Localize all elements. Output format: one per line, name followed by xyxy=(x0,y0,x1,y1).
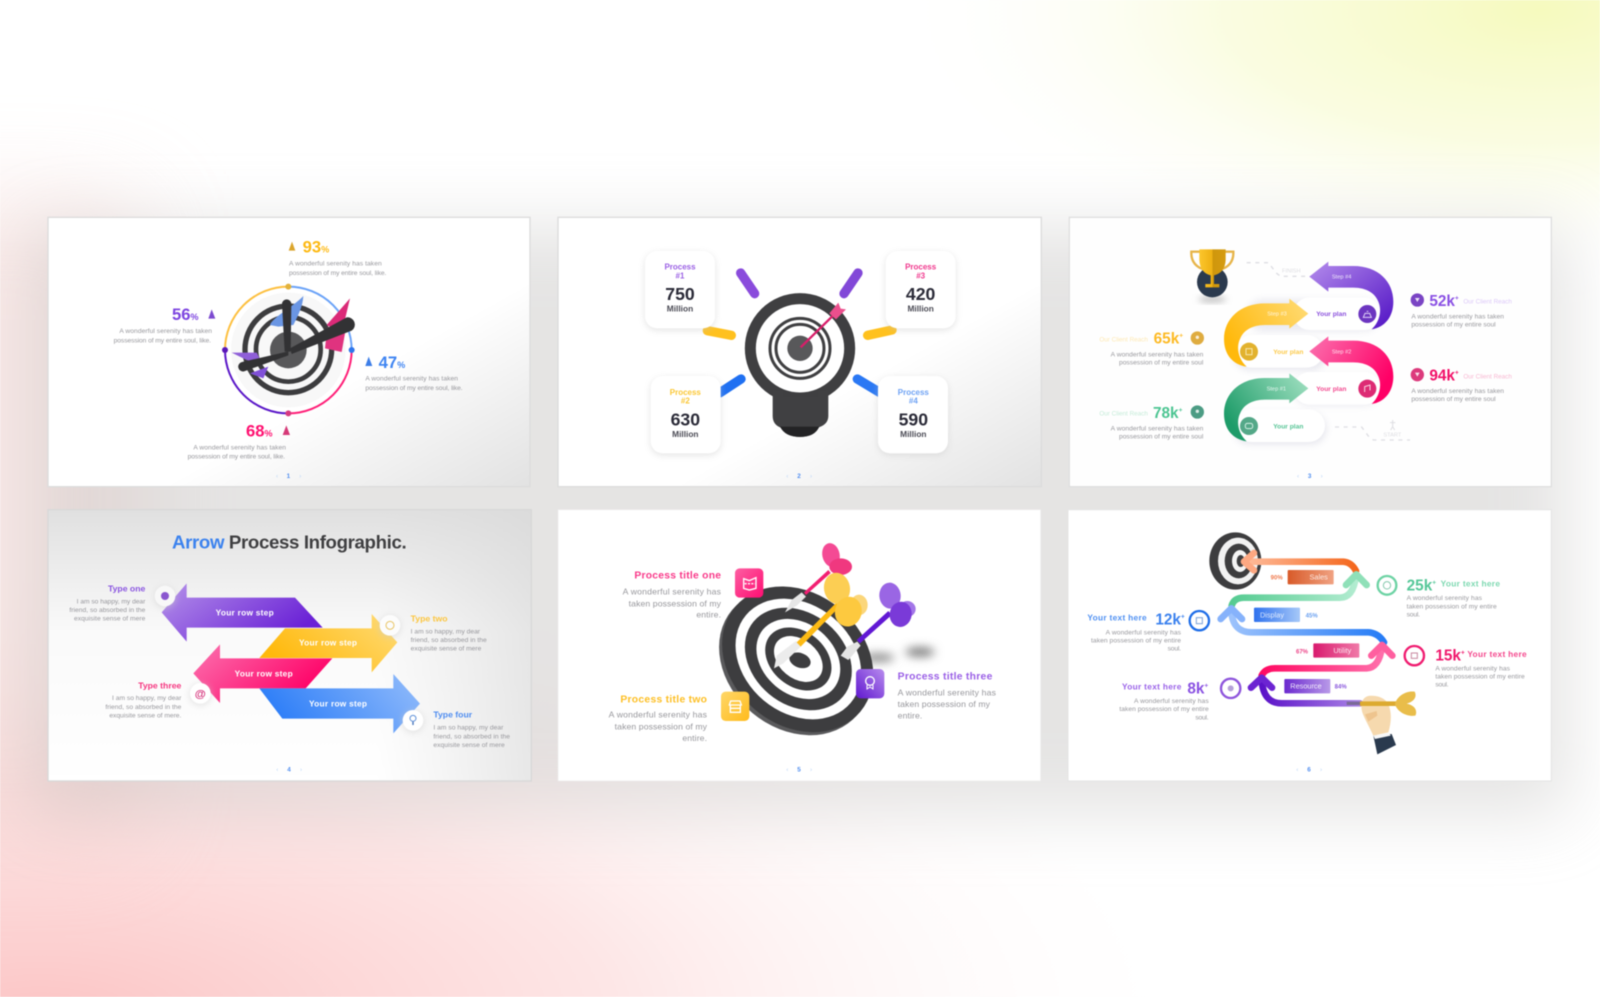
stat: 8k xyxy=(1119,679,1240,721)
text: type three: I am so happy, my dear xyxy=(112,695,182,702)
ring chart with target and darts xyxy=(222,284,355,416)
arrow: type two yellow xyxy=(259,614,397,672)
stat: 47 percent xyxy=(365,353,463,392)
pagination 3: 3 xyxy=(1308,473,1312,480)
stat: 15k: + xyxy=(1461,650,1465,657)
stat: 12k: A wonderful serenity has xyxy=(1106,629,1182,636)
title: Arrow Process Infographic. xyxy=(172,532,407,553)
light rays xyxy=(707,255,892,393)
panel 4 background xyxy=(48,510,531,781)
stat: 56 percent: A wonderful serenity has taken xyxy=(119,328,212,335)
card: process 1: Million xyxy=(667,304,693,314)
plan labels and icons: Your plan xyxy=(1273,349,1303,356)
stat: 93 percent: 93% xyxy=(303,238,329,257)
pagination 6: ‹ xyxy=(1296,767,1298,774)
stat: 15k: soul. xyxy=(1435,682,1449,689)
icon: type two clock xyxy=(379,615,401,638)
stat: 15k: 15k xyxy=(1435,648,1461,665)
light bulb with target xyxy=(750,299,850,437)
stat: 15k: A wonderful serenity has xyxy=(1435,666,1511,673)
panel: slide 2 light bulb target xyxy=(558,217,1041,487)
panel: slide 6 winding path to target xyxy=(1068,510,1551,781)
bar: resource: 84% xyxy=(1335,685,1347,691)
arrow: step 1 green xyxy=(1224,373,1308,441)
text: type three xyxy=(105,681,182,720)
icon tile: badge xyxy=(856,669,884,698)
pagination 2: › xyxy=(810,473,812,480)
text: type one: I am so happy, my dear xyxy=(77,598,146,605)
pagination 6: 6 xyxy=(1307,767,1311,774)
card: process 3: #3 xyxy=(916,271,926,280)
path: green xyxy=(1232,574,1367,606)
card: process 4: Million xyxy=(900,429,927,439)
text: type one: friend, so absorbed in the xyxy=(69,607,146,614)
text: process title three: A wonderful serenity has xyxy=(898,687,997,697)
text: type four: friend, so absorbed in the xyxy=(433,733,510,740)
finish dashed trail xyxy=(1247,263,1310,276)
path: blue xyxy=(1221,608,1384,642)
card: process 4 xyxy=(878,376,948,455)
text: process title two: Process title two xyxy=(620,694,707,705)
stat: 12k: soul. xyxy=(1168,646,1181,653)
pagination 5 xyxy=(786,767,812,774)
small target xyxy=(1209,532,1261,590)
card: process 2 xyxy=(651,376,721,455)
text: type three: Type three xyxy=(138,681,182,691)
text: process title two xyxy=(609,694,708,743)
text: process title one: Process title one xyxy=(634,570,721,581)
bar: sales xyxy=(1271,570,1334,584)
stat: 78k: Our Client Reach xyxy=(1099,411,1148,418)
text: process title one xyxy=(623,570,722,620)
plan labels and icons: Your plan xyxy=(1316,386,1346,393)
panel: slide 4 arrow process xyxy=(48,510,531,781)
stat: 25k: A wonderful serenity has xyxy=(1407,595,1483,602)
icon tile: store xyxy=(721,692,749,721)
plan labels and icons: Your plan xyxy=(1316,311,1346,318)
card: process 2: 630 xyxy=(671,409,700,429)
arrow: type one purple: Your row step xyxy=(216,607,274,617)
arrow: type three pink xyxy=(193,644,332,703)
stat: 94k: possession of my entire soul xyxy=(1411,396,1496,403)
stat: 52k: possession of my entire soul xyxy=(1411,321,1496,328)
panel 5 background xyxy=(558,510,1041,781)
stat: 94k: Our Client Reach xyxy=(1463,373,1512,380)
stat: 8k: soul. xyxy=(1195,714,1209,721)
pagination 1 xyxy=(276,473,301,480)
text: type four: I am so happy, my dear xyxy=(433,725,504,732)
text: process title one: entire. xyxy=(696,610,721,620)
stat: 12k: taken possession of my entire xyxy=(1091,637,1181,644)
stat: 8k: + xyxy=(1204,682,1208,689)
card: process 1: Process xyxy=(664,263,696,272)
arrow: type four blue xyxy=(259,674,420,733)
start dashed trail xyxy=(1335,420,1410,440)
stat: 25k: Your text here xyxy=(1441,579,1500,589)
stat: 8k: 8k xyxy=(1187,680,1204,697)
pagination 6 xyxy=(1296,767,1322,774)
icon: at sign: @ xyxy=(195,688,206,700)
icon: type one xyxy=(154,586,176,608)
text: type three: friend, so absorbed in the xyxy=(105,704,182,711)
stat: 65k: Our Client Reach xyxy=(1099,336,1148,343)
text: type four xyxy=(433,710,510,749)
stat: 15k xyxy=(1405,646,1527,689)
text: process title three: entire. xyxy=(898,710,922,720)
dart: purple xyxy=(841,582,916,660)
stat: 56 percent xyxy=(114,305,215,344)
text: process title two: taken possession of my xyxy=(615,722,708,732)
panel 2 background xyxy=(558,217,1041,487)
stat: 94k: A wonderful serenity has taken xyxy=(1411,388,1504,395)
card: process 1: #1 xyxy=(676,271,685,280)
bar: sales: 90% xyxy=(1271,576,1283,582)
path: pink xyxy=(1262,645,1392,676)
text: type four: Type four xyxy=(433,710,473,720)
pagination 6: › xyxy=(1320,767,1322,774)
dartboard xyxy=(690,556,903,765)
dart: pink xyxy=(785,541,852,612)
pagination 4: › xyxy=(300,767,302,774)
bar: utility: Utility xyxy=(1333,646,1352,655)
text: type two: Type two xyxy=(411,614,448,624)
card: process 2: #2 xyxy=(681,397,690,406)
icon: at sign xyxy=(189,683,211,706)
pagination 2: ‹ xyxy=(786,473,788,480)
bar: resource: Resource xyxy=(1290,682,1322,691)
pagination 5: 5 xyxy=(797,767,801,774)
bar: sales: Sales xyxy=(1309,572,1328,581)
stat: 78k: + xyxy=(1179,407,1183,414)
panel: slide 5 dartboard xyxy=(558,510,1041,781)
stat: 94k xyxy=(1411,368,1512,403)
stat: 15k: Your text here xyxy=(1467,649,1527,659)
pagination 1: ‹ xyxy=(276,473,278,480)
panel 3 background xyxy=(1069,217,1551,487)
arrow: step 2 pink xyxy=(1309,336,1393,404)
card: process 4: Process xyxy=(898,388,929,397)
stat: 65k: + xyxy=(1179,333,1183,340)
text: process title three: taken possession of my xyxy=(898,699,991,709)
pagination 4 xyxy=(276,767,302,774)
stat: 8k: Your text here xyxy=(1122,681,1182,691)
pagination 1: › xyxy=(299,473,301,480)
stat: 94k: 94k xyxy=(1429,368,1455,385)
text: type three: exquisite sense of mere. xyxy=(109,713,181,720)
stat: 65k: possession of my entire soul xyxy=(1119,359,1204,366)
text: type two: I am so happy, my dear xyxy=(411,628,481,635)
stat: 68 percent: 68% xyxy=(246,421,273,440)
path: purple xyxy=(1251,678,1360,703)
trophy xyxy=(1191,249,1233,302)
stat: 52k: + xyxy=(1455,295,1459,302)
panel: slide 1 radial target percentages xyxy=(48,217,530,487)
panel 6 background xyxy=(1068,510,1551,781)
dart shadows xyxy=(862,647,935,662)
text: process title three: Process title three xyxy=(898,672,993,683)
stat: 15k: taken possession of my entire xyxy=(1435,674,1525,681)
text: type one xyxy=(69,584,146,623)
stat: 47 percent: possession of my entire soul, like. xyxy=(365,385,463,392)
pagination 3: ‹ xyxy=(1297,473,1299,480)
stat: 78k: 78k xyxy=(1153,405,1179,422)
dart: yellow xyxy=(774,571,868,668)
text: type two: friend, so absorbed in the xyxy=(411,637,487,644)
pagination 5: › xyxy=(810,767,812,774)
plan labels and icons: Your plan xyxy=(1273,423,1303,430)
finish dashed trail: FINISH xyxy=(1282,269,1301,275)
stat: 78k: A wonderful serenity has taken xyxy=(1111,425,1204,432)
text: process title two: entire. xyxy=(682,733,707,743)
stat: 25k xyxy=(1378,576,1500,618)
stat: 25k: + xyxy=(1432,580,1436,587)
bar: utility: 67% xyxy=(1296,649,1309,655)
card: process 4: 590 xyxy=(899,409,928,429)
stat: 68 percent: A wonderful serenity has taken xyxy=(193,444,286,451)
start dashed trail: START xyxy=(1383,433,1402,439)
pagination 4: 4 xyxy=(287,767,291,774)
stat: 25k: soul. xyxy=(1407,611,1420,618)
bar: utility xyxy=(1296,643,1359,658)
card: process 2: Process xyxy=(670,388,701,397)
stat: 12k: 12k xyxy=(1155,612,1181,629)
stat: 25k: 25k xyxy=(1407,578,1432,595)
stat: 52k xyxy=(1411,293,1512,328)
stat: 65k: A wonderful serenity has taken xyxy=(1111,351,1204,358)
text: type two: exquisite sense of mere xyxy=(411,646,482,653)
pagination 3: › xyxy=(1321,473,1323,480)
stat: 12k xyxy=(1087,611,1209,653)
text: process title three xyxy=(898,672,997,720)
pagination 2: 2 xyxy=(797,473,801,480)
text: type one: exquisite sense of mere xyxy=(74,616,146,623)
bar: resource xyxy=(1284,679,1347,693)
hand holding dart xyxy=(1347,691,1416,754)
arrow: step 4 purple xyxy=(1309,262,1393,329)
stat: 12k: + xyxy=(1181,614,1185,621)
pagination 5: ‹ xyxy=(786,767,788,774)
panel 1 background xyxy=(48,217,530,487)
text: process title one: taken possession of my xyxy=(629,598,722,608)
arrow: type four blue: Your row step xyxy=(309,698,367,708)
stat: 68 percent: possession of my entire soul, like. xyxy=(188,454,285,461)
arrow: type three pink: Your row step xyxy=(235,668,293,678)
stat: 94k: + xyxy=(1455,370,1459,377)
card: process 2: Million xyxy=(672,429,699,439)
plan pills xyxy=(1233,297,1381,445)
stat: 65k: 65k xyxy=(1154,331,1179,348)
card: process 1: 750 xyxy=(665,284,695,304)
icon: bulb xyxy=(402,710,424,733)
card: process 3 xyxy=(886,251,956,330)
panel: slide 3 curved step arrows xyxy=(1069,217,1551,487)
stat: 93 percent xyxy=(289,238,386,277)
stat: 25k: taken possession of my entire xyxy=(1407,603,1497,610)
stat: 78k: possession of my entire soul xyxy=(1119,433,1204,440)
card: process 3: Million xyxy=(907,304,934,314)
stat: 65k xyxy=(1099,331,1204,366)
text: type two xyxy=(411,614,487,653)
pagination 4: ‹ xyxy=(276,767,278,774)
stat: 8k: A wonderful serenity has xyxy=(1134,698,1209,705)
stat: 47 percent: A wonderful serenity has taken xyxy=(365,376,458,383)
plan labels and icons xyxy=(1240,305,1376,435)
stat: 68 percent xyxy=(188,421,290,461)
arrow: type two yellow: Your row step xyxy=(299,638,357,648)
card: process 3: Process xyxy=(905,263,937,272)
pagination 1: 1 xyxy=(287,473,291,480)
arrow: step 2 pink: Step #2 xyxy=(1332,349,1351,355)
stat: 52k: 52k xyxy=(1429,293,1455,310)
arrow: step 4 purple: Step #4 xyxy=(1332,275,1351,281)
text: type four: exquisite sense of mere xyxy=(433,742,505,749)
stat: 56 percent: 56% xyxy=(172,305,199,324)
pagination 2 xyxy=(786,473,812,480)
text: process title one: A wonderful serenity has xyxy=(623,586,722,596)
stat: 47 percent: 47% xyxy=(379,353,405,372)
stat: 93 percent: A wonderful serenity has taken xyxy=(289,261,382,268)
arrow: step 3 yellow: Step #3 xyxy=(1267,312,1287,318)
bar: display: Display xyxy=(1260,610,1284,619)
path: orange to target xyxy=(1244,553,1356,571)
pagination 3 xyxy=(1297,473,1323,480)
stat: 78k xyxy=(1099,405,1204,440)
stat: 8k: taken possession of my entire xyxy=(1119,706,1209,713)
icon tile: map xyxy=(735,568,763,598)
card: process 3: 420 xyxy=(906,284,936,304)
stat: 12k: Your text here xyxy=(1087,613,1147,623)
text: type one: Type one xyxy=(108,584,146,594)
stat: 93 percent: possession of my entire soul, like. xyxy=(289,270,386,277)
card: process 4: #4 xyxy=(909,397,918,406)
arrow: type one purple xyxy=(162,583,323,642)
text: process title two: A wonderful serenity has xyxy=(609,710,708,720)
arrow: step 3 yellow xyxy=(1224,299,1308,367)
stat: 52k: Our Client Reach xyxy=(1463,299,1512,306)
card: process 1 xyxy=(645,251,715,330)
bar: display xyxy=(1254,608,1318,622)
stat: 52k: A wonderful serenity has taken xyxy=(1411,313,1504,320)
stat: 56 percent: possession of my entire soul, like. xyxy=(114,337,211,344)
arrow: step 1 green: Step #1 xyxy=(1267,386,1286,392)
bar: display: 45% xyxy=(1306,613,1318,619)
